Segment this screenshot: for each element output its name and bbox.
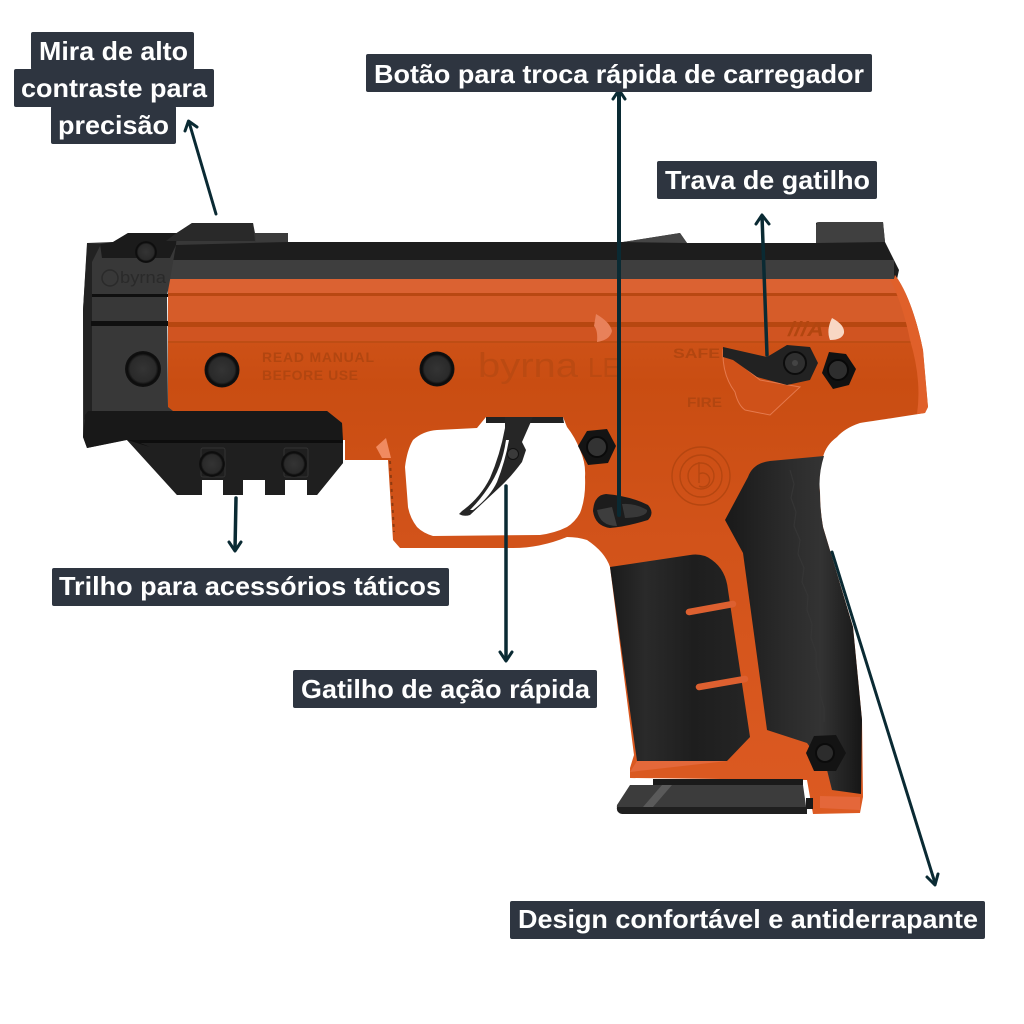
magazine floor plate	[617, 779, 813, 814]
grip wave texture	[790, 470, 824, 722]
magazine release button	[593, 494, 652, 528]
trigger housing slot	[486, 417, 564, 423]
grip panel: front	[610, 555, 750, 761]
label: grip: Design confortável e antiderrapante	[518, 904, 978, 934]
front black block: byrna	[120, 268, 167, 287]
label: safety: Trava de gatilho	[665, 165, 870, 195]
trigger	[459, 417, 533, 516]
safety engraved labels: SAFE	[673, 345, 720, 361]
safety engraved labels: FIRE	[687, 394, 722, 410]
grip panel: rear	[725, 456, 862, 794]
label: sight	[14, 32, 214, 144]
engraved frame text: byrna	[478, 347, 578, 385]
flame marks and serial mark	[594, 314, 844, 342]
rail bolt 2	[281, 448, 308, 477]
trigger guard opening	[405, 417, 585, 536]
label: magazine button: Botão para troca rápida de carregador	[374, 59, 864, 89]
safety selector recess	[723, 350, 800, 415]
frame bolt 2	[204, 352, 240, 388]
grip base lip highlight	[630, 761, 727, 772]
highlight above trigger guard	[376, 438, 391, 458]
safety engraved labels	[673, 345, 722, 410]
orange frame	[168, 275, 928, 814]
frame bolt 3	[420, 352, 454, 386]
rail notches	[202, 480, 307, 496]
engraved frame text: LE	[588, 352, 620, 383]
arrow: grip	[832, 552, 938, 885]
engraved frame text	[262, 347, 620, 385]
engraved frame text: READ MANUAL	[262, 349, 374, 365]
trigger guard serrations	[390, 461, 394, 532]
frame ridges	[168, 275, 928, 414]
grip ribs	[689, 604, 745, 687]
label: rail: Trilho para acessórios táticos	[59, 571, 441, 601]
pistol illustration	[83, 222, 928, 814]
rail bolt 1	[199, 448, 225, 477]
arrow: trigger	[500, 486, 512, 661]
grip toe highlight	[820, 796, 860, 810]
frame bolt 1	[125, 351, 161, 387]
label: sight: Mira de alto	[39, 36, 188, 66]
arrow: sight	[185, 121, 216, 214]
hex bolt: trigger guard	[578, 429, 616, 465]
label: sight: precisão	[58, 110, 169, 140]
front black block	[83, 223, 343, 496]
slide top black	[170, 222, 899, 288]
label: trigger: Gatilho de ação rápida	[301, 674, 591, 704]
hex bolt: grip	[806, 735, 846, 771]
engraved frame text: BEFORE USE	[262, 367, 358, 383]
safety lever	[723, 345, 818, 385]
arrow: safety	[756, 215, 769, 355]
flame marks and serial mark: ///A	[787, 319, 824, 341]
hex bolt: rear	[822, 352, 856, 389]
label: sight: contraste para	[21, 73, 208, 103]
arrow: magazine button	[613, 90, 625, 515]
sight bolt	[135, 241, 157, 263]
byrna circular logo	[672, 447, 730, 505]
arrow: rail	[229, 498, 241, 551]
